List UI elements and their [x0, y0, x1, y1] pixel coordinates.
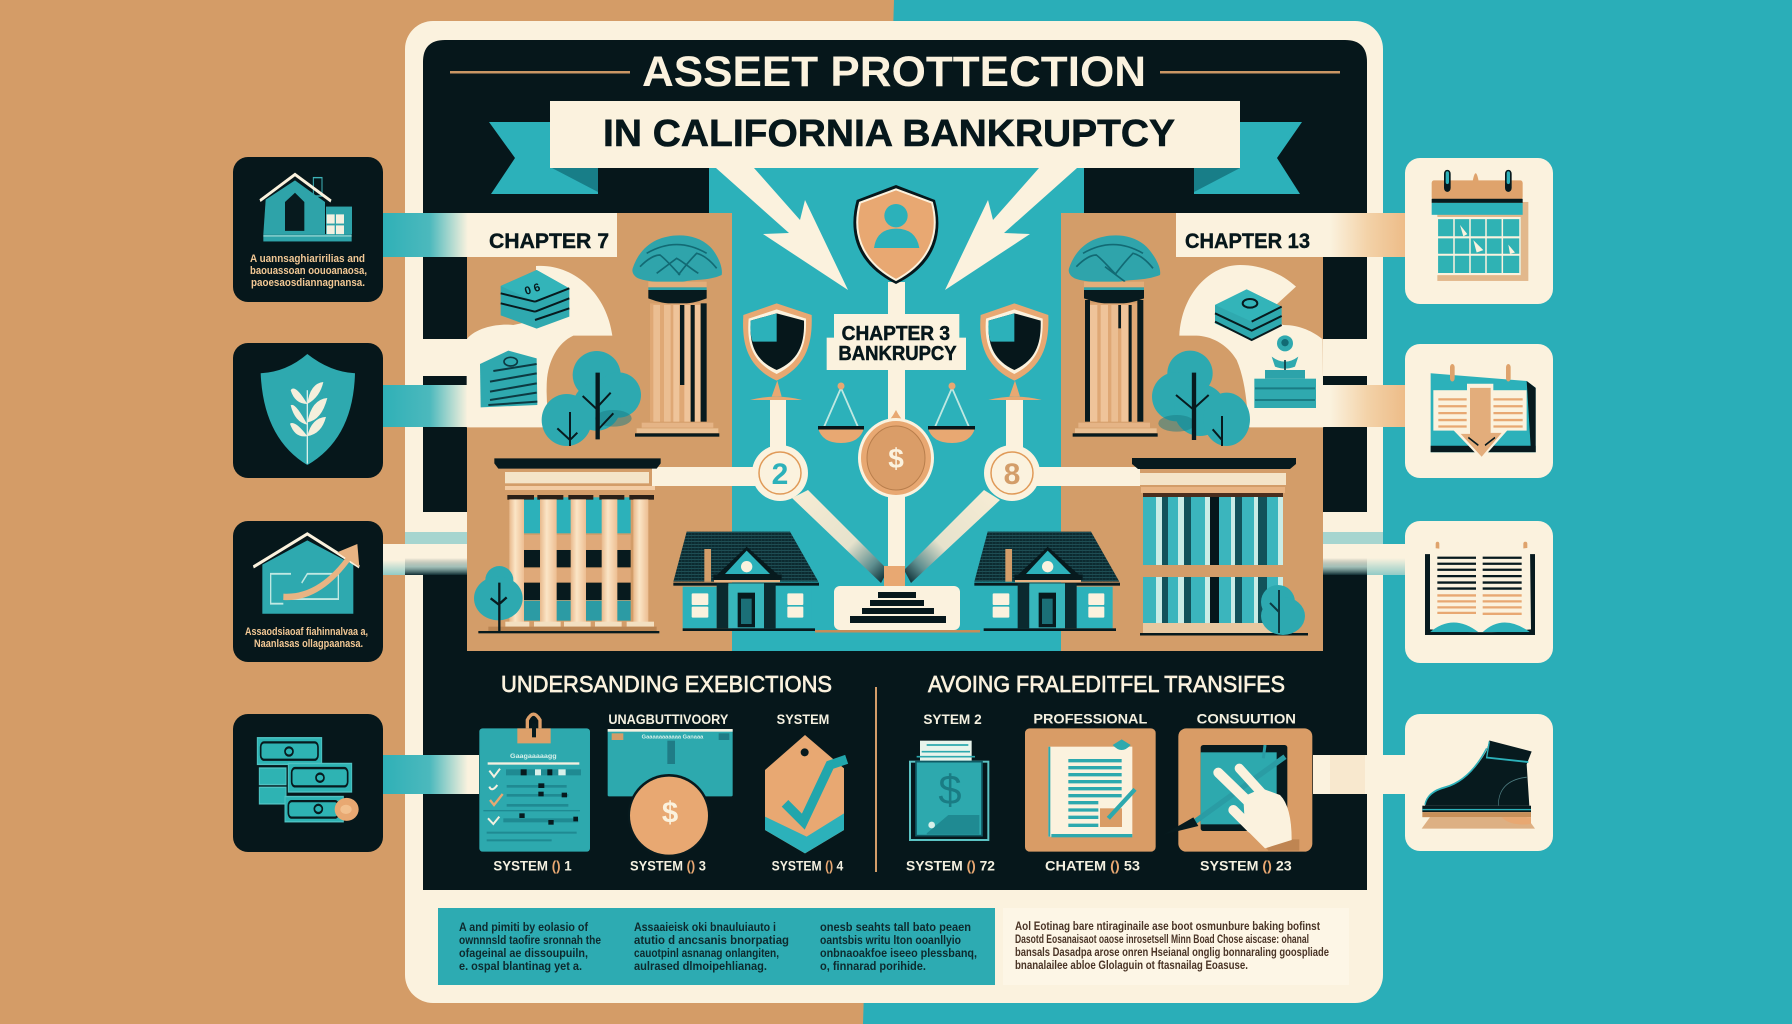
- Chapter 13 heading: CHAPTER 13: [1185, 229, 1310, 253]
- panel: left card house arrow: [233, 521, 383, 662]
- panel: footer cream notes: Dasotd Eosanaisaot oaose inrosetsell Minn Boad Chose aiscase: ohanal: [1015, 932, 1309, 946]
- label: professional: PROFESSIONAL: [1033, 710, 1148, 726]
- text block: column two: cauotpinl asnanag onlangiten,: [634, 946, 779, 960]
- banner ribbon: [489, 101, 1302, 194]
- icon: small shield left: [743, 303, 812, 400]
- icon: open book: [1425, 542, 1535, 635]
- icon: clipboard: [479, 714, 590, 852]
- text block: column one: e. ospal blantinag yet a.: [459, 959, 582, 973]
- icon: right courthouse: [1132, 458, 1308, 636]
- icon: dollar medallion: [858, 410, 934, 498]
- icon: cash stack upper: [501, 270, 569, 329]
- panel: footer cream notes: bnanalailee abloe Glolaguin ot ftasnailag Eoasuse.: [1015, 958, 1248, 972]
- connector: centre spine: [652, 282, 1140, 583]
- label: consultation: CONSUUTION: [1197, 710, 1296, 726]
- text block: column three: onesb seahts tall bato peaen: [820, 920, 971, 934]
- title: ASSEET PROTTECTION: [642, 48, 1146, 96]
- divider label line: [875, 687, 877, 872]
- panel: left card shield: [233, 343, 383, 478]
- panel: right card arrow calendar: [1405, 344, 1553, 478]
- panel: Chapter 7 illustrations: [467, 235, 722, 446]
- text block: card caption: [245, 626, 368, 650]
- text block: column one: A and pimiti by eolasio of: [459, 920, 589, 934]
- text block: column three: o, finnarad porihide.: [820, 959, 926, 973]
- label: system 3: SYSTEM () 3: [630, 858, 706, 874]
- icon: boot: [1422, 741, 1535, 829]
- panel: footer teal notes: [438, 908, 995, 985]
- icon: teal card with coin: [608, 729, 733, 857]
- cream blob: [1179, 265, 1323, 427]
- icon: trees: [542, 351, 641, 446]
- icon: number 2 node: 2: [772, 458, 788, 491]
- icon: trees: [1152, 351, 1250, 446]
- text block: column two: aulrased dlmoipehlianag.: [634, 959, 767, 973]
- panel: Chapter 13 backdrop: [1061, 213, 1323, 651]
- icon: teal card with coin: Gaaaaaaaaaaa Ganaaa: [642, 734, 704, 740]
- icon: person shield: [853, 185, 938, 284]
- icon: house: [260, 174, 352, 241]
- label: chapter 53: CHATEM () 53: [1045, 858, 1140, 874]
- icon: calendar: [1432, 170, 1528, 281]
- label: Chapter 3 bankruptcy: BANKRUPCY: [838, 343, 957, 365]
- text block: column one: ofageinal ae dissoupuiln,: [459, 946, 588, 960]
- panel: footer cream notes: Aol Eotinag bare ntiraginaile ase boot osmunbure baking bofinst: [1015, 919, 1320, 933]
- heading: avoiding fraudulent transfers: AVOING FRALEDITFEL TRANSIFES: [928, 671, 1285, 697]
- text block: card caption: Assaodsiaoaf fiahinnalvaa a,: [245, 626, 368, 638]
- panel: Chapter 13 illustrations: [1069, 235, 1323, 446]
- label: Chapter 3 bankruptcy: CHAPTER 3: [842, 323, 950, 345]
- icon: small shield right: [980, 303, 1048, 400]
- icon: signing hand: [1163, 728, 1312, 852]
- label: system: SYSTEM: [777, 711, 829, 727]
- icon: left house: [673, 532, 819, 631]
- panel: Chapter 7 backdrop: [467, 213, 732, 651]
- icon: cash stack upper: 0 6: [523, 282, 542, 298]
- icon: calendar with down arrow: [1431, 364, 1536, 460]
- arrow: right: [945, 168, 1077, 290]
- icon: number 8 node: 8: [1004, 458, 1020, 491]
- text block: column three: [820, 920, 977, 973]
- label: system 23: SYSTEM () 23: [1200, 858, 1292, 874]
- cream blob: [467, 266, 612, 427]
- text block: column two: [634, 920, 789, 973]
- subtitle: IN CALIFORNIA BANKRUPTCY: [603, 113, 1175, 155]
- text block: column one: [459, 920, 601, 973]
- icon: pedestal steps: [815, 566, 980, 632]
- icon: leaf shield: [261, 354, 355, 465]
- icon: money document: $: [938, 766, 962, 813]
- text block: card caption: paoesaosdiannagnansa.: [251, 277, 365, 289]
- label: system 2: SYTEM 2: [923, 711, 982, 727]
- icon: cash stack: [1215, 289, 1282, 340]
- panel: footer cream notes: [1003, 908, 1349, 985]
- text block: column two: atutio d ancsanis bnorpatiag: [634, 933, 789, 947]
- label: system 72: SYSTEM () 72: [906, 858, 995, 874]
- panel: exemptions row: [479, 711, 847, 874]
- panel: left card house: [233, 157, 383, 302]
- text block: column three: onbnaoakfoe iseeo plessbanq,: [820, 946, 977, 960]
- text block: column one: ownnnsld taofire sronnah the: [459, 933, 601, 947]
- icon: balance scales: [818, 382, 975, 443]
- label: system 4: SYSTEM () 4: [772, 858, 844, 874]
- panel: teal centre: [709, 168, 1084, 651]
- panel: centre illustrations: [743, 185, 1048, 400]
- icon: small tree: [1261, 585, 1305, 635]
- icon: small tree: [474, 566, 523, 633]
- labels: top: UNAGBUTTIVOORY: [608, 711, 729, 727]
- panel: right card boot: [1405, 714, 1553, 851]
- icon: left courthouse: [474, 458, 661, 633]
- text block: column two: Assaaieisk oki bnauluiauto i: [634, 920, 776, 934]
- panel: transfers row: [906, 710, 1312, 874]
- Chapter 7 heading: CHAPTER 7: [489, 229, 609, 253]
- arrow: left: [716, 168, 848, 290]
- icon: number 8 node: [984, 445, 1040, 501]
- panel: left card money: [233, 714, 383, 852]
- label: Chapter 3 bankruptcy: [827, 314, 966, 370]
- text block: column three: oantsbis writu lton ooanllyio: [820, 933, 961, 947]
- icon: column: [1069, 235, 1160, 437]
- icon: dollar medallion: $: [888, 443, 904, 474]
- icon: house with arrow: [253, 534, 359, 614]
- icon: professional document: [1025, 728, 1156, 852]
- text block: card caption: baouassoan oouoanaosa,: [250, 265, 367, 277]
- text block: card caption: [250, 253, 367, 289]
- icon: right house: [974, 532, 1120, 631]
- icon: cash stack lower: [480, 351, 537, 407]
- icon: banknotes: [257, 738, 359, 822]
- connectors: left: [383, 213, 617, 794]
- panel: footer cream notes: bansals Dasadpa arose onren Hseianal onglig bonnaraling goospliade: [1015, 945, 1329, 959]
- label: system 1: SYSTEM () 1: [493, 858, 572, 874]
- icon: number 2 node: [752, 445, 808, 501]
- text block: card caption: A uannsaghiaririlias and: [250, 253, 365, 265]
- icon: check tag: [765, 735, 847, 853]
- text block: card caption: Naanlasas ollagpaanasa.: [254, 638, 363, 650]
- panel: main card: [405, 21, 1383, 1003]
- icon: teal card with coin: $: [662, 797, 678, 830]
- panel: right card calendar: [1405, 158, 1553, 304]
- connectors: right: [1176, 213, 1405, 794]
- icon: column: [632, 235, 722, 437]
- icon: money document: [910, 741, 988, 840]
- panel: right card book: [1405, 521, 1553, 663]
- icon: clipboard: Gaagaaaaagg: [510, 753, 557, 760]
- icon: plant and stack: [1254, 335, 1316, 408]
- heading: understanding exemptions: UNDERSANDING EXEBICTIONS: [501, 671, 832, 697]
